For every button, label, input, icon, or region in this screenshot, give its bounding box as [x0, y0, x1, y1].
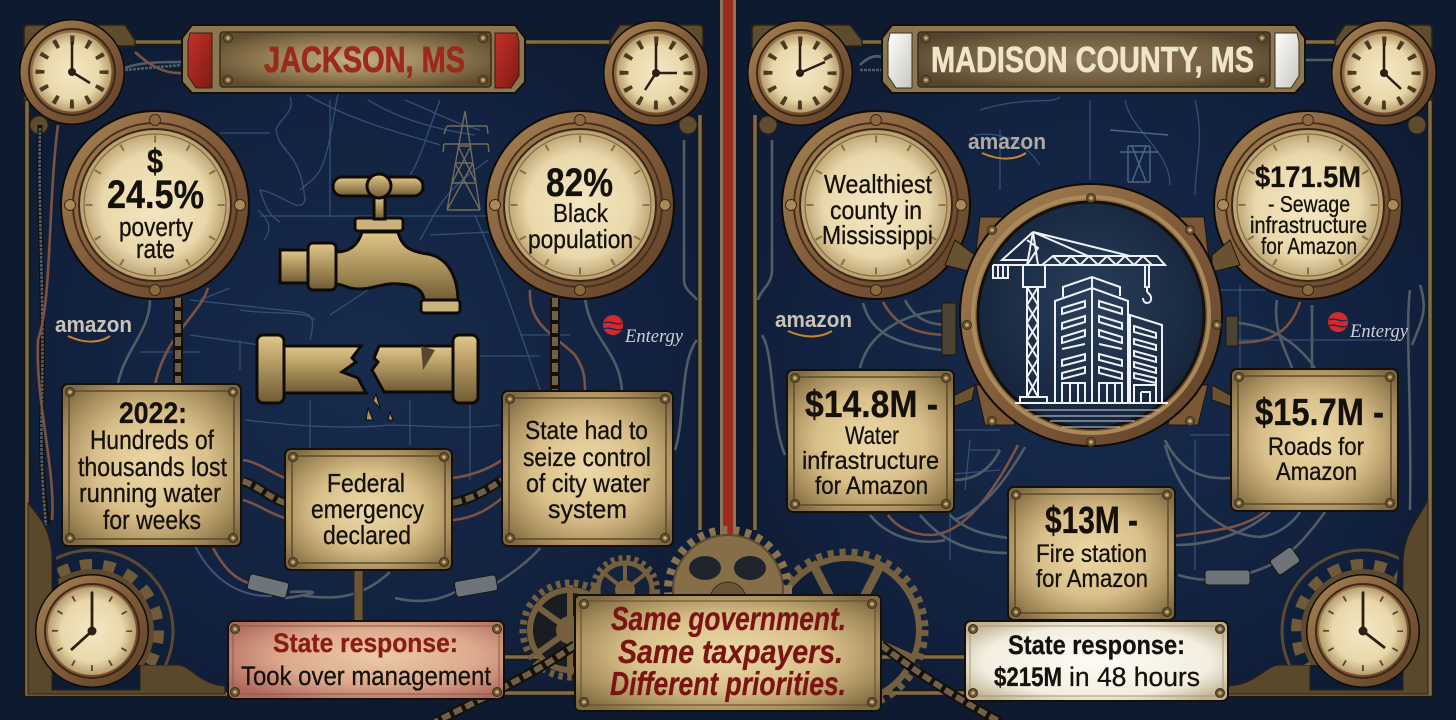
clock: Madison bottom right [1280, 548, 1420, 688]
plate: center conclusion: Same taxpayers. [618, 633, 843, 670]
clock: Jackson top left [19, 19, 125, 125]
icon: building [1015, 277, 1168, 427]
icon: broken pipe [257, 335, 478, 420]
plate: state seized control: State had to [525, 415, 648, 445]
plate: fire station: $13M - [1045, 500, 1138, 542]
icon: tower crane [993, 232, 1165, 403]
plate: Jackson state response: Took over management [241, 661, 491, 691]
plate: state seized control [502, 391, 673, 546]
clock: Jackson top right [603, 20, 709, 126]
plate: water infrastructure: $14.8M - [805, 384, 938, 426]
gauge: poverty rate: $ [147, 143, 163, 181]
gauge: poverty rate: rate [136, 234, 175, 264]
entergy logo: Madison [1328, 312, 1409, 342]
amazon logo: Madison top: amazon [968, 129, 1046, 154]
panel: Madison background [755, 40, 1429, 695]
porthole: construction dial [945, 183, 1240, 447]
plate: 2022 water loss: 2022: [119, 397, 187, 430]
gauge: poverty rate: poverty [119, 212, 193, 242]
gears [523, 530, 925, 708]
gauge: sewage infrastructure: for Amazon [1261, 233, 1357, 259]
plate: center conclusion: Same government. [611, 600, 846, 637]
panel: Jackson background [27, 40, 701, 695]
entergy logo: Madison: Entergy [1349, 321, 1409, 342]
gauge: sewage infrastructure: $171.5M [1255, 161, 1361, 194]
gauge: Black population: population [528, 224, 633, 254]
plate: roads: Roads for [1268, 433, 1364, 461]
icon: pylon faded Madison [1110, 130, 1168, 182]
plate: Jackson state response [228, 621, 504, 699]
plate: water infrastructure: for Amazon [815, 472, 928, 500]
plate: fire station: Fire station [1036, 540, 1147, 568]
title plate: Madison [882, 25, 1305, 93]
center divider [720, 0, 736, 535]
plate: state seized control: system [548, 494, 627, 524]
plate: roads: $15.7M - [1255, 392, 1384, 434]
plate: 2022 water loss: for weeks [103, 505, 201, 535]
icon: faucet [280, 174, 460, 313]
gauge: wealthiest county: Wealthiest [824, 169, 933, 199]
plate: Madison state response: in 48 hours [1069, 662, 1200, 692]
plate: federal emergency: emergency [311, 494, 424, 524]
plate: Madison state response: $215M [994, 662, 1062, 692]
title text: JACKSON, MS [264, 39, 465, 80]
gauge: sewage infrastructure: - Sewage [1268, 191, 1350, 217]
title text: MADISON COUNTY, MS [931, 39, 1254, 80]
gauge: wealthiest county [781, 110, 971, 300]
plate: roads [1231, 369, 1398, 511]
plate: state seized control: of city water [526, 468, 650, 498]
map lines: Jackson [140, 94, 570, 480]
wires: Madison [758, 56, 1424, 585]
plate: federal emergency: Federal [327, 468, 405, 498]
gauge: sewage infrastructure [1213, 110, 1403, 300]
clock: Jackson bottom left [35, 548, 174, 688]
gauge: poverty rate [60, 110, 250, 300]
plate: water infrastructure [787, 370, 954, 512]
plate: federal emergency: declared [323, 520, 411, 550]
gauge: Black population: 82% [546, 161, 613, 205]
plate: 2022 water loss [62, 384, 241, 546]
map lines: Madison [940, 97, 1400, 570]
amazon logo: Madison middle: amazon [775, 307, 852, 332]
plate: federal emergency [285, 449, 452, 570]
gauge: Black population: Black [553, 198, 609, 228]
plate: center conclusion [575, 595, 881, 711]
clock: Madison top right [1331, 20, 1437, 126]
plate: 2022 water loss: running water [79, 478, 221, 508]
plate: roads: Amazon [1276, 458, 1357, 486]
title plate: Jackson [182, 25, 525, 93]
plate: fire station [1008, 487, 1175, 620]
wires: Jackson [38, 52, 697, 622]
plate: 2022 water loss: Hundreds of [90, 425, 214, 455]
entergy logo: Jackson [603, 315, 684, 347]
gauge: poverty rate: 24.5% [107, 173, 204, 217]
plate: center conclusion: Different priorities. [610, 665, 846, 702]
gauge: Black population [485, 110, 675, 300]
chains: bottom [435, 645, 1000, 720]
clock: Madison top left [747, 20, 853, 126]
gauge: wealthiest county: county in [830, 195, 922, 225]
gauge: wealthiest county: Mississippi [822, 220, 933, 250]
plate: water infrastructure: infrastructure [802, 447, 939, 475]
gauge: sewage infrastructure: infrastructure [1250, 212, 1367, 238]
plate: 2022 water loss: thousands lost [78, 452, 227, 482]
entergy logo: Jackson: Entergy [624, 326, 684, 347]
icon: transmission pylon [443, 111, 489, 210]
plate: fire station: for Amazon [1036, 565, 1148, 593]
amazon logo: Jackson: amazon [55, 312, 132, 337]
plate: Madison state response: State response: [1008, 630, 1185, 660]
plate: Jackson state response: State response: [273, 628, 458, 658]
plate: Madison state response [965, 621, 1228, 701]
plate: state seized control: seize control [523, 442, 651, 472]
plate: water infrastructure: Water [845, 422, 899, 450]
